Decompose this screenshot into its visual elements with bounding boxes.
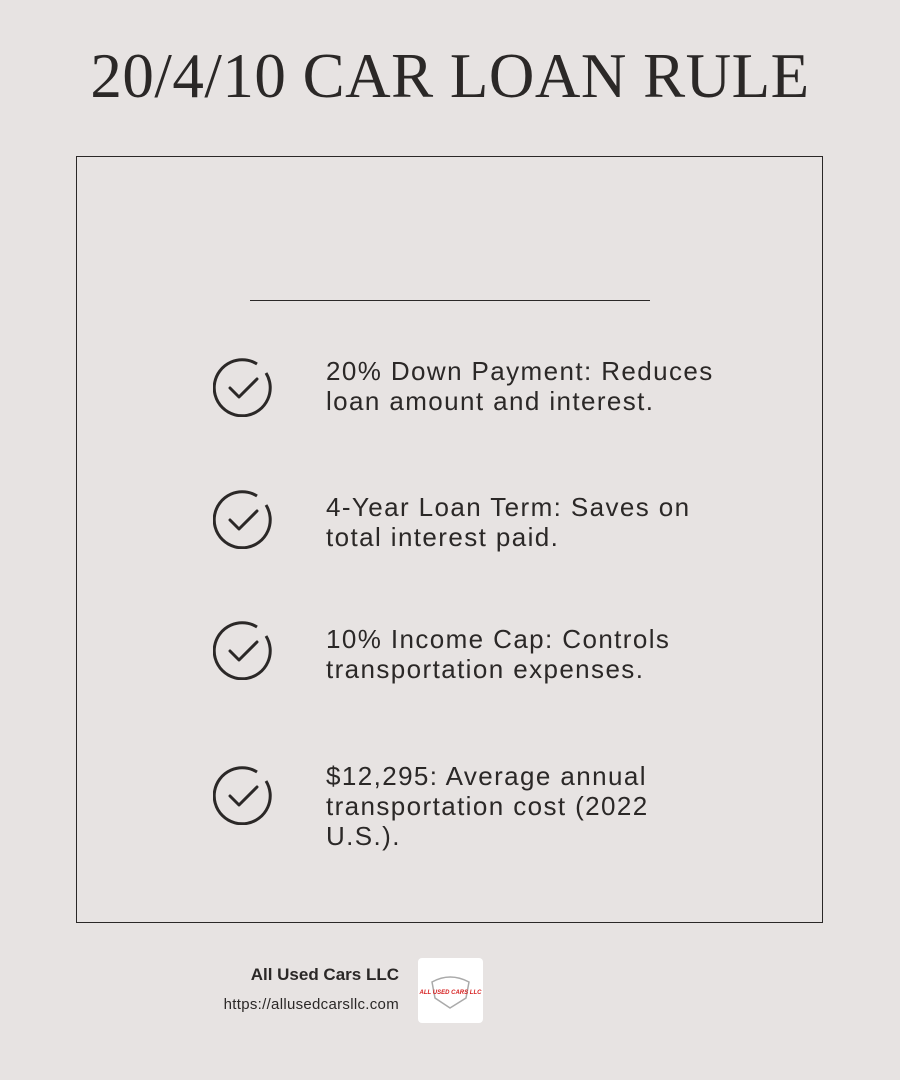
- footer: company name: All Used Cars LLC: [251, 965, 399, 984]
- text: down payment: 20% Down Payment: Reduces loan amount and interest.: [326, 356, 714, 416]
- text: average cost: $12,295: Average annual transportation cost (2022 U.S.).: [326, 761, 649, 851]
- panel: rules box: [76, 156, 823, 923]
- text: loan term: 4-Year Loan Term: Saves on total interest paid.: [326, 492, 690, 552]
- icon: check 3: [213, 621, 272, 680]
- icon: check 2: [213, 490, 272, 549]
- text: income cap: 10% Income Cap: Controls transportation expenses.: [326, 624, 670, 684]
- logo: [418, 958, 483, 1023]
- title: 20/4/10 CAR LOAN RULE: [90, 41, 810, 111]
- logo: ALL USED CARS LLC: [419, 990, 482, 996]
- footer: url: https://allusedcarsllc.com: [224, 996, 399, 1013]
- icon: check 4: [213, 766, 272, 825]
- icon: check 1: [213, 358, 272, 417]
